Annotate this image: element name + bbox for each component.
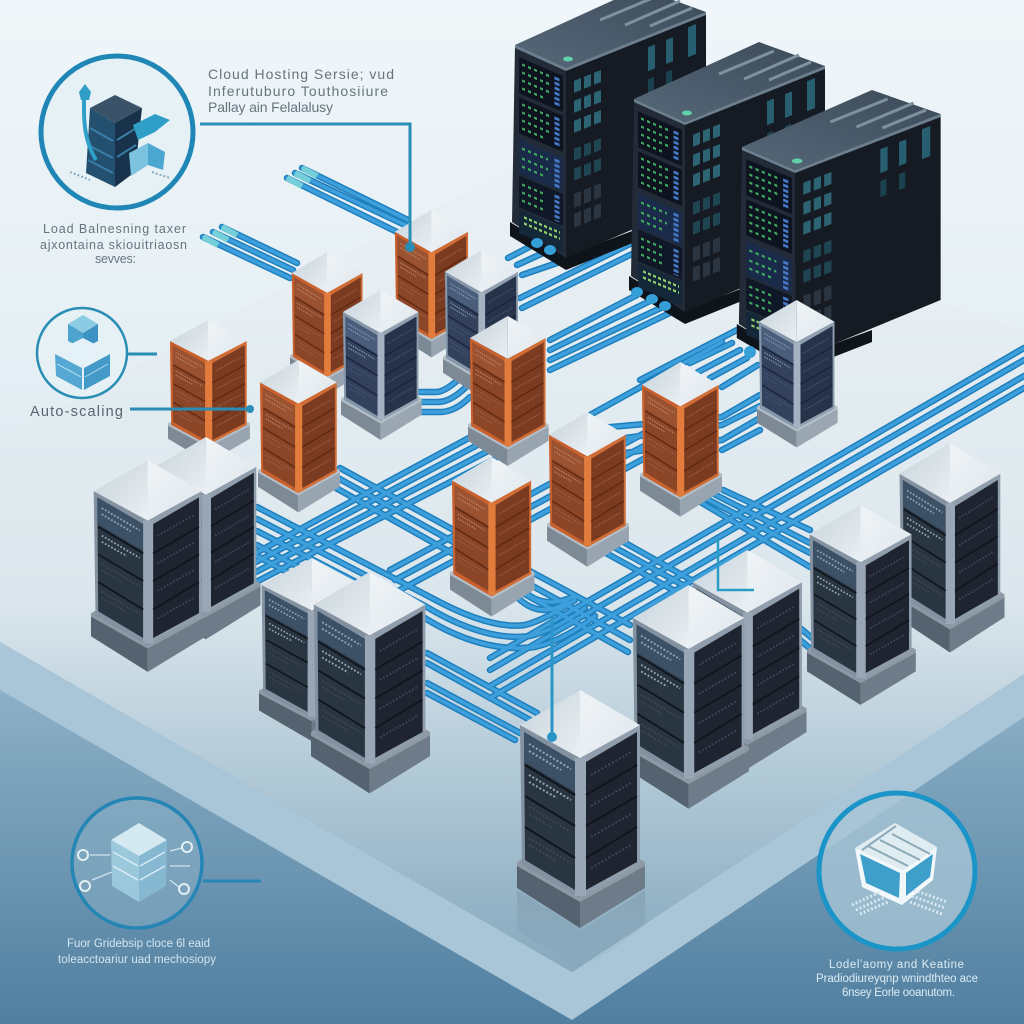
rack reflection (517, 890, 645, 972)
orange rack 5 (640, 362, 722, 517)
navy rack 3 (757, 300, 838, 448)
text: cloud hosting description: Cloud Hosting Sersie; vud (208, 66, 394, 82)
icon: server with arrows (41, 56, 193, 208)
network cables (203, 168, 1024, 740)
gray rack far right (897, 443, 1005, 652)
gray rack front left (91, 460, 206, 672)
dark tower server 2 (629, 42, 825, 324)
gray rack right (807, 505, 916, 705)
connector line (127, 352, 157, 356)
gray rack right rear (690, 550, 806, 769)
navy rack 1 (443, 250, 521, 398)
cable connectors at tower bases (531, 238, 756, 358)
text: load balancing description: sevves: (95, 252, 136, 266)
gray rack lower left rear (259, 558, 367, 741)
text: load balancing description: ajxontaina skiouitriaosn (40, 238, 187, 252)
dark tower server 3 (737, 90, 941, 372)
leader line to orange rack (200, 124, 415, 252)
orange rack 2 (290, 252, 366, 395)
gray rack lower left (311, 572, 430, 793)
icon: stacked cubes (37, 308, 127, 398)
text: lower right description: Pradiodiureyqnp wnindthteo ace (816, 973, 978, 985)
text: load balancing description: Load Balnesning taxer (43, 222, 186, 236)
panel: auto-scaling callout (30, 308, 254, 420)
text: lower right description: 6nsey Eorle ooanutom. (842, 987, 955, 999)
icon: server with nodes (72, 798, 202, 928)
gray rack lower right (630, 585, 749, 809)
orange rack 6 (258, 360, 340, 512)
floor platform (0, 170, 1024, 972)
leader to orange rack (130, 405, 254, 413)
orange rack 3 (468, 316, 549, 466)
leader to center rack (547, 617, 557, 742)
text: lower left description: toleacctoariur uad mechosiopy (58, 954, 216, 966)
orange rack 8 (450, 457, 534, 616)
navy rack 2 (341, 290, 422, 440)
text: lower left description: Fuor Gridebsip cloce 6l eaid (67, 938, 210, 950)
dark tower server 1 (510, 0, 706, 270)
gray rack center foreground (517, 690, 645, 928)
text: lower right description: Lodel'aomy and Keatine (829, 959, 964, 971)
panel: cloud hosting callout (40, 56, 415, 266)
text: cloud hosting description: Pallay ain Felalalusy (208, 99, 333, 115)
connector line (203, 880, 261, 882)
panel: lower right callout (816, 793, 981, 999)
text: cloud hosting description: Inferutuburo Touthosiiure (208, 83, 388, 99)
icon: data module box (819, 793, 975, 949)
orange rack 7 (547, 412, 629, 567)
floor edge strip (0, 642, 1024, 1020)
orange rack 4 (168, 320, 250, 463)
callout L marker (718, 538, 754, 590)
orange rack 1 (393, 210, 471, 358)
gray rack back left (153, 437, 261, 639)
panel: lower left callout (58, 798, 261, 966)
text: auto-scaling: Auto-scaling (30, 404, 123, 420)
